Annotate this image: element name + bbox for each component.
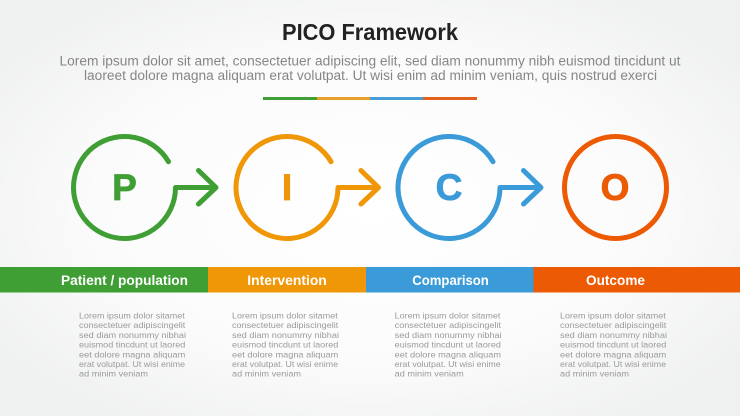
text block: Comparison description: consectetuer adipiscingelit	[395, 320, 502, 330]
icon: I circle with arrow: I	[282, 167, 292, 208]
text block: Comparison description: Lorem ipsum dolor sitamet	[395, 310, 501, 320]
text block: Patient / population description: sed diam nonummy nibhai	[79, 330, 186, 340]
text block: Intervention description: eet dolore magna aliquam	[232, 349, 338, 359]
icon: P circle with arrow	[74, 136, 216, 238]
icon: C circle with arrow	[398, 136, 541, 238]
text block: Outcome description: erat volutpat. Ut wisi enime	[560, 359, 666, 369]
text block: Outcome description: ad minim veniam	[560, 369, 629, 379]
label band: Patient / population	[0, 267, 208, 292]
icon: O circle: O	[601, 167, 629, 208]
text block: Outcome description	[560, 310, 667, 379]
text block: Patient / population description: euismod tincdunt ut laored	[79, 340, 186, 350]
text block: Outcome description: Lorem ipsum dolor sitamet	[560, 310, 666, 320]
label band: Comparison: Comparison	[412, 273, 489, 288]
title: PICO Framework	[282, 19, 458, 45]
text block: Intervention description: ad minim veniam	[232, 369, 301, 379]
icon: I circle with arrow	[236, 136, 378, 238]
text block: Comparison description: sed diam nonummy nibhai	[395, 330, 502, 340]
label band: Outcome	[534, 267, 740, 292]
text block: Outcome description: eet dolore magna aliquam	[560, 349, 666, 359]
label band: Comparison	[366, 267, 534, 292]
text block: Intervention description: erat volutpat. Ut wisi enime	[232, 359, 338, 369]
subtitle text block: laoreet dolore magna aliquam erat volutpat. Ut wisi enim ad minim veniam, quis nostrud exerci	[84, 68, 657, 83]
text block: Comparison description	[395, 310, 502, 379]
label band: Outcome: Outcome	[586, 273, 645, 288]
text block: Patient / population description: erat volutpat. Ut wisi enime	[79, 359, 185, 369]
label band: Patient / population: Patient / population	[61, 273, 188, 288]
text block: Patient / population description: Lorem ipsum dolor sitamet	[79, 310, 185, 320]
text block: Intervention description	[232, 310, 339, 379]
title divider: four colour segments	[263, 97, 477, 100]
text block: Comparison description: erat volutpat. Ut wisi enime	[395, 359, 501, 369]
text block: Intervention description: sed diam nonummy nibhai	[232, 330, 339, 340]
icon: C circle with arrow: C	[436, 167, 462, 208]
text block: Patient / population description: ad minim veniam	[79, 369, 148, 379]
text block: Patient / population description: consectetuer adipiscingelit	[79, 320, 186, 330]
text block: Patient / population description	[79, 310, 186, 379]
icon: P circle with arrow: P	[112, 167, 137, 208]
icon: O circle	[564, 136, 666, 238]
text block: Comparison description: ad minim veniam	[395, 369, 464, 379]
text block: Comparison description: eet dolore magna aliquam	[395, 349, 501, 359]
text block: Intervention description: Lorem ipsum dolor sitamet	[232, 310, 338, 320]
label band: Intervention	[208, 267, 366, 292]
text block: Outcome description: sed diam nonummy nibhai	[560, 330, 667, 340]
text block: Intervention description: consectetuer adipiscingelit	[232, 320, 339, 330]
label band: Intervention: Intervention	[247, 273, 327, 288]
subtitle text block	[60, 54, 681, 83]
text block: Outcome description: consectetuer adipiscingelit	[560, 320, 667, 330]
text block: Intervention description: euismod tincdunt ut laored	[232, 340, 339, 350]
subtitle text block: Lorem ipsum dolor sit amet, consectetuer adipiscing elit, sed diam nonummy nibh euismod tincidunt ut	[60, 54, 681, 68]
text block: Patient / population description: eet dolore magna aliquam	[79, 349, 185, 359]
text block: Comparison description: euismod tincdunt ut laored	[395, 340, 501, 350]
text block: Outcome description: euismod tincdunt ut laored	[560, 340, 667, 350]
